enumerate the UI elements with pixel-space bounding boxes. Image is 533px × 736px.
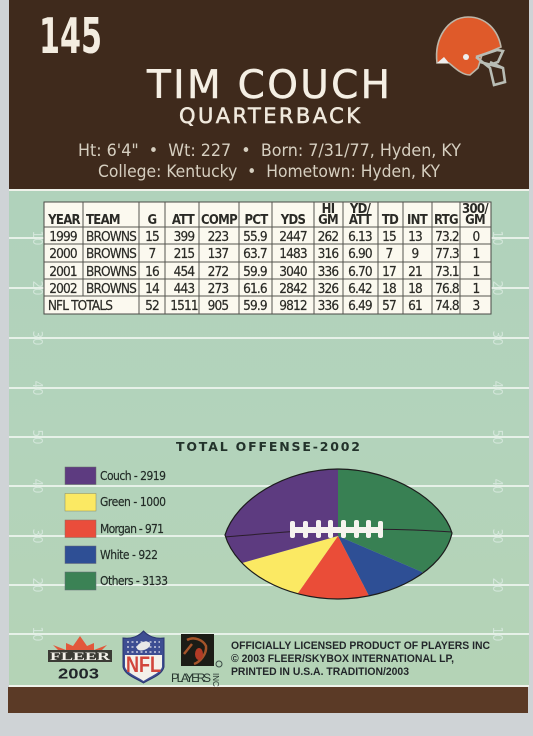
table header row: YD/	[349, 202, 372, 217]
table header row: TEAM	[86, 213, 120, 228]
row 1999: 399	[174, 229, 194, 245]
row 2001: 454	[174, 264, 195, 280]
table header row: YEAR	[47, 213, 81, 228]
panel: header band	[9, 0, 529, 191]
row 1999: BROWNS	[86, 229, 137, 245]
row 2002: 443	[174, 281, 194, 297]
table header row: YDS	[280, 213, 306, 228]
logo: Fleer 2003: FLEER	[50, 649, 110, 663]
row 2001	[49, 264, 480, 280]
license text: OFFICIALLY LICENSED PRODUCT OF PLAYERS INC	[231, 640, 490, 652]
row NFL totals: 3	[473, 298, 480, 314]
row 2001: 1	[473, 264, 480, 280]
yard numbers right: 10	[489, 231, 504, 245]
row 1999: 2447	[279, 229, 307, 245]
row 2000: 9	[412, 246, 419, 262]
bio line 2: College: Kentucky • Hometown: Hyden, KY	[98, 162, 441, 181]
yard numbers right	[489, 231, 504, 641]
yard numbers left: 30	[29, 529, 44, 543]
row 2002: 61.6	[243, 281, 267, 297]
row 2000: 7	[386, 246, 393, 262]
panel: football field	[9, 191, 529, 687]
legend item: Morgan: Morgan - 971	[100, 522, 164, 536]
legend item: White: White - 922	[100, 548, 158, 562]
row 2001: 6.70	[348, 264, 372, 280]
yard numbers left: 50	[29, 430, 44, 444]
panel: bottom band	[8, 687, 528, 713]
row 1999: 262	[318, 229, 338, 245]
yard numbers right: 20	[489, 281, 504, 295]
table header row: 300/	[462, 202, 489, 217]
slice: White	[338, 536, 422, 596]
row 2000: 6.90	[348, 246, 372, 262]
row 1999: 0	[473, 229, 480, 245]
table header row: GM	[318, 213, 338, 228]
row 2001: 336	[318, 264, 338, 280]
chart: football pie	[224, 468, 453, 600]
yard numbers right: 40	[489, 479, 504, 493]
logo: Fleer 2003	[48, 636, 112, 682]
table header row: ATT	[172, 213, 195, 228]
table header row: HI	[322, 202, 335, 217]
stats table	[44, 202, 491, 314]
row NFL totals: 1511	[170, 298, 198, 314]
table header row: ATT	[349, 213, 372, 228]
row 2002: 18	[408, 281, 422, 297]
legend item: Couch: Couch - 2919	[100, 469, 166, 483]
yard numbers right: 30	[489, 331, 504, 345]
ball outline	[225, 469, 452, 599]
legend item: Green: Green - 1000	[100, 495, 166, 509]
row 2001: 2001	[49, 264, 77, 280]
table header row: GM	[465, 213, 485, 228]
table header row: INT	[407, 213, 428, 228]
yard numbers left: 10	[29, 231, 44, 245]
logo: NFL shield	[123, 631, 164, 683]
logo: Players Inc: PLAYERS	[171, 671, 211, 685]
card number: 145	[39, 8, 102, 65]
row 1999: 1999	[49, 229, 77, 245]
row 2002: 1	[473, 281, 480, 297]
yard numbers right: 40	[489, 381, 504, 395]
logo: Players Inc: INC	[211, 673, 220, 687]
logo: NFL shield: NFL	[126, 652, 161, 677]
row NFL totals: 57	[382, 298, 396, 314]
row 2002: 2842	[279, 281, 307, 297]
slice: Green	[242, 536, 338, 593]
logo: Players Inc	[171, 634, 222, 687]
row 1999: 55.9	[243, 229, 267, 245]
row 2002: 6.42	[348, 281, 372, 297]
row 1999: 15	[382, 229, 396, 245]
row NFL totals: 74.8	[435, 298, 459, 314]
table header row: RTG	[434, 213, 458, 228]
row 2002: 76.8	[435, 281, 459, 297]
row 2001: 16	[145, 264, 159, 280]
slice: Others	[338, 470, 452, 572]
player name: TIM COUCH	[146, 63, 390, 108]
row NFL totals: 52	[145, 298, 159, 314]
row 2001: 272	[208, 264, 228, 280]
row NFL totals	[48, 298, 480, 314]
table header row: PCT	[244, 213, 268, 228]
row 2001: 3040	[279, 264, 307, 280]
row 2000: 1483	[279, 246, 307, 262]
row NFL totals: 59.9	[243, 298, 267, 314]
row NFL totals: 61	[408, 298, 422, 314]
yard numbers right: 30	[489, 529, 504, 543]
license text	[231, 640, 490, 678]
row 2002: 2002	[49, 281, 77, 297]
row 2000: 316	[318, 246, 338, 262]
row 2000: 1	[473, 246, 480, 262]
row 2002	[49, 281, 480, 297]
row 1999	[49, 229, 480, 245]
legend item: Others: Others - 3133	[100, 574, 168, 588]
row 2000: BROWNS	[86, 246, 137, 262]
row 2001: 21	[408, 264, 422, 280]
row 1999: 223	[208, 229, 228, 245]
row 2000: 77.3	[435, 246, 459, 262]
yard numbers left	[29, 231, 44, 641]
logo: Fleer 2003: 2003	[58, 666, 99, 682]
yard numbers right: 10	[489, 627, 504, 641]
icon: laces	[290, 520, 383, 538]
row 2002: 273	[208, 281, 228, 297]
row 1999: 73.2	[435, 229, 459, 245]
row NFL totals: 9812	[279, 298, 307, 314]
table header row: COMP	[201, 213, 238, 228]
yard numbers left: 20	[29, 281, 44, 295]
row 2001: 17	[382, 264, 396, 280]
row 2002: 14	[145, 281, 160, 297]
row 1999: 15	[145, 229, 159, 245]
row 2000: 7	[149, 246, 156, 262]
table header row	[47, 202, 489, 228]
yard numbers left: 40	[29, 381, 44, 395]
slice: Couch	[226, 470, 338, 563]
legend	[65, 467, 168, 590]
row 2002: 326	[318, 281, 338, 297]
yard numbers left: 20	[29, 578, 44, 592]
row 2000	[49, 246, 480, 262]
yard numbers left: 40	[29, 479, 44, 493]
slice: Morgan	[298, 536, 369, 598]
license text: © 2003 FLEER/SKYBOX INTERNATIONAL LP,	[231, 653, 454, 665]
yard numbers left: 30	[29, 331, 44, 345]
row NFL totals: NFL TOTALS	[48, 298, 113, 314]
row 2002: 18	[382, 281, 396, 297]
row NFL totals: 6.49	[348, 298, 372, 314]
icon: Browns helmet	[437, 17, 505, 85]
row NFL totals: 336	[318, 298, 338, 314]
position: QUARTERBACK	[179, 104, 361, 128]
table header row: G	[148, 213, 157, 228]
ball seam	[225, 529, 452, 537]
bio line 1: Ht: 6'4" • Wt: 227 • Born: 7/31/77, Hyden, KY	[78, 141, 462, 160]
row 2000: 137	[208, 246, 228, 262]
row 2000: 2000	[49, 246, 77, 262]
row 2001: 73.1	[435, 264, 459, 280]
table header row: TD	[382, 213, 399, 228]
row NFL totals: 905	[208, 298, 228, 314]
chart title: TOTAL OFFENSE-2002	[176, 439, 360, 454]
row 1999: 13	[408, 229, 422, 245]
row 2001: 59.9	[243, 264, 267, 280]
row 2000: 215	[174, 246, 194, 262]
row 2001: BROWNS	[86, 264, 137, 280]
row 1999: 6.13	[348, 229, 372, 245]
row 2000: 63.7	[243, 246, 267, 262]
yard numbers right: 20	[489, 578, 504, 592]
yard numbers right: 50	[489, 430, 504, 444]
row 2002: BROWNS	[86, 281, 137, 297]
license text: PRINTED IN U.S.A. TRADITION/2003	[231, 666, 409, 678]
yard numbers left: 10	[29, 627, 44, 641]
